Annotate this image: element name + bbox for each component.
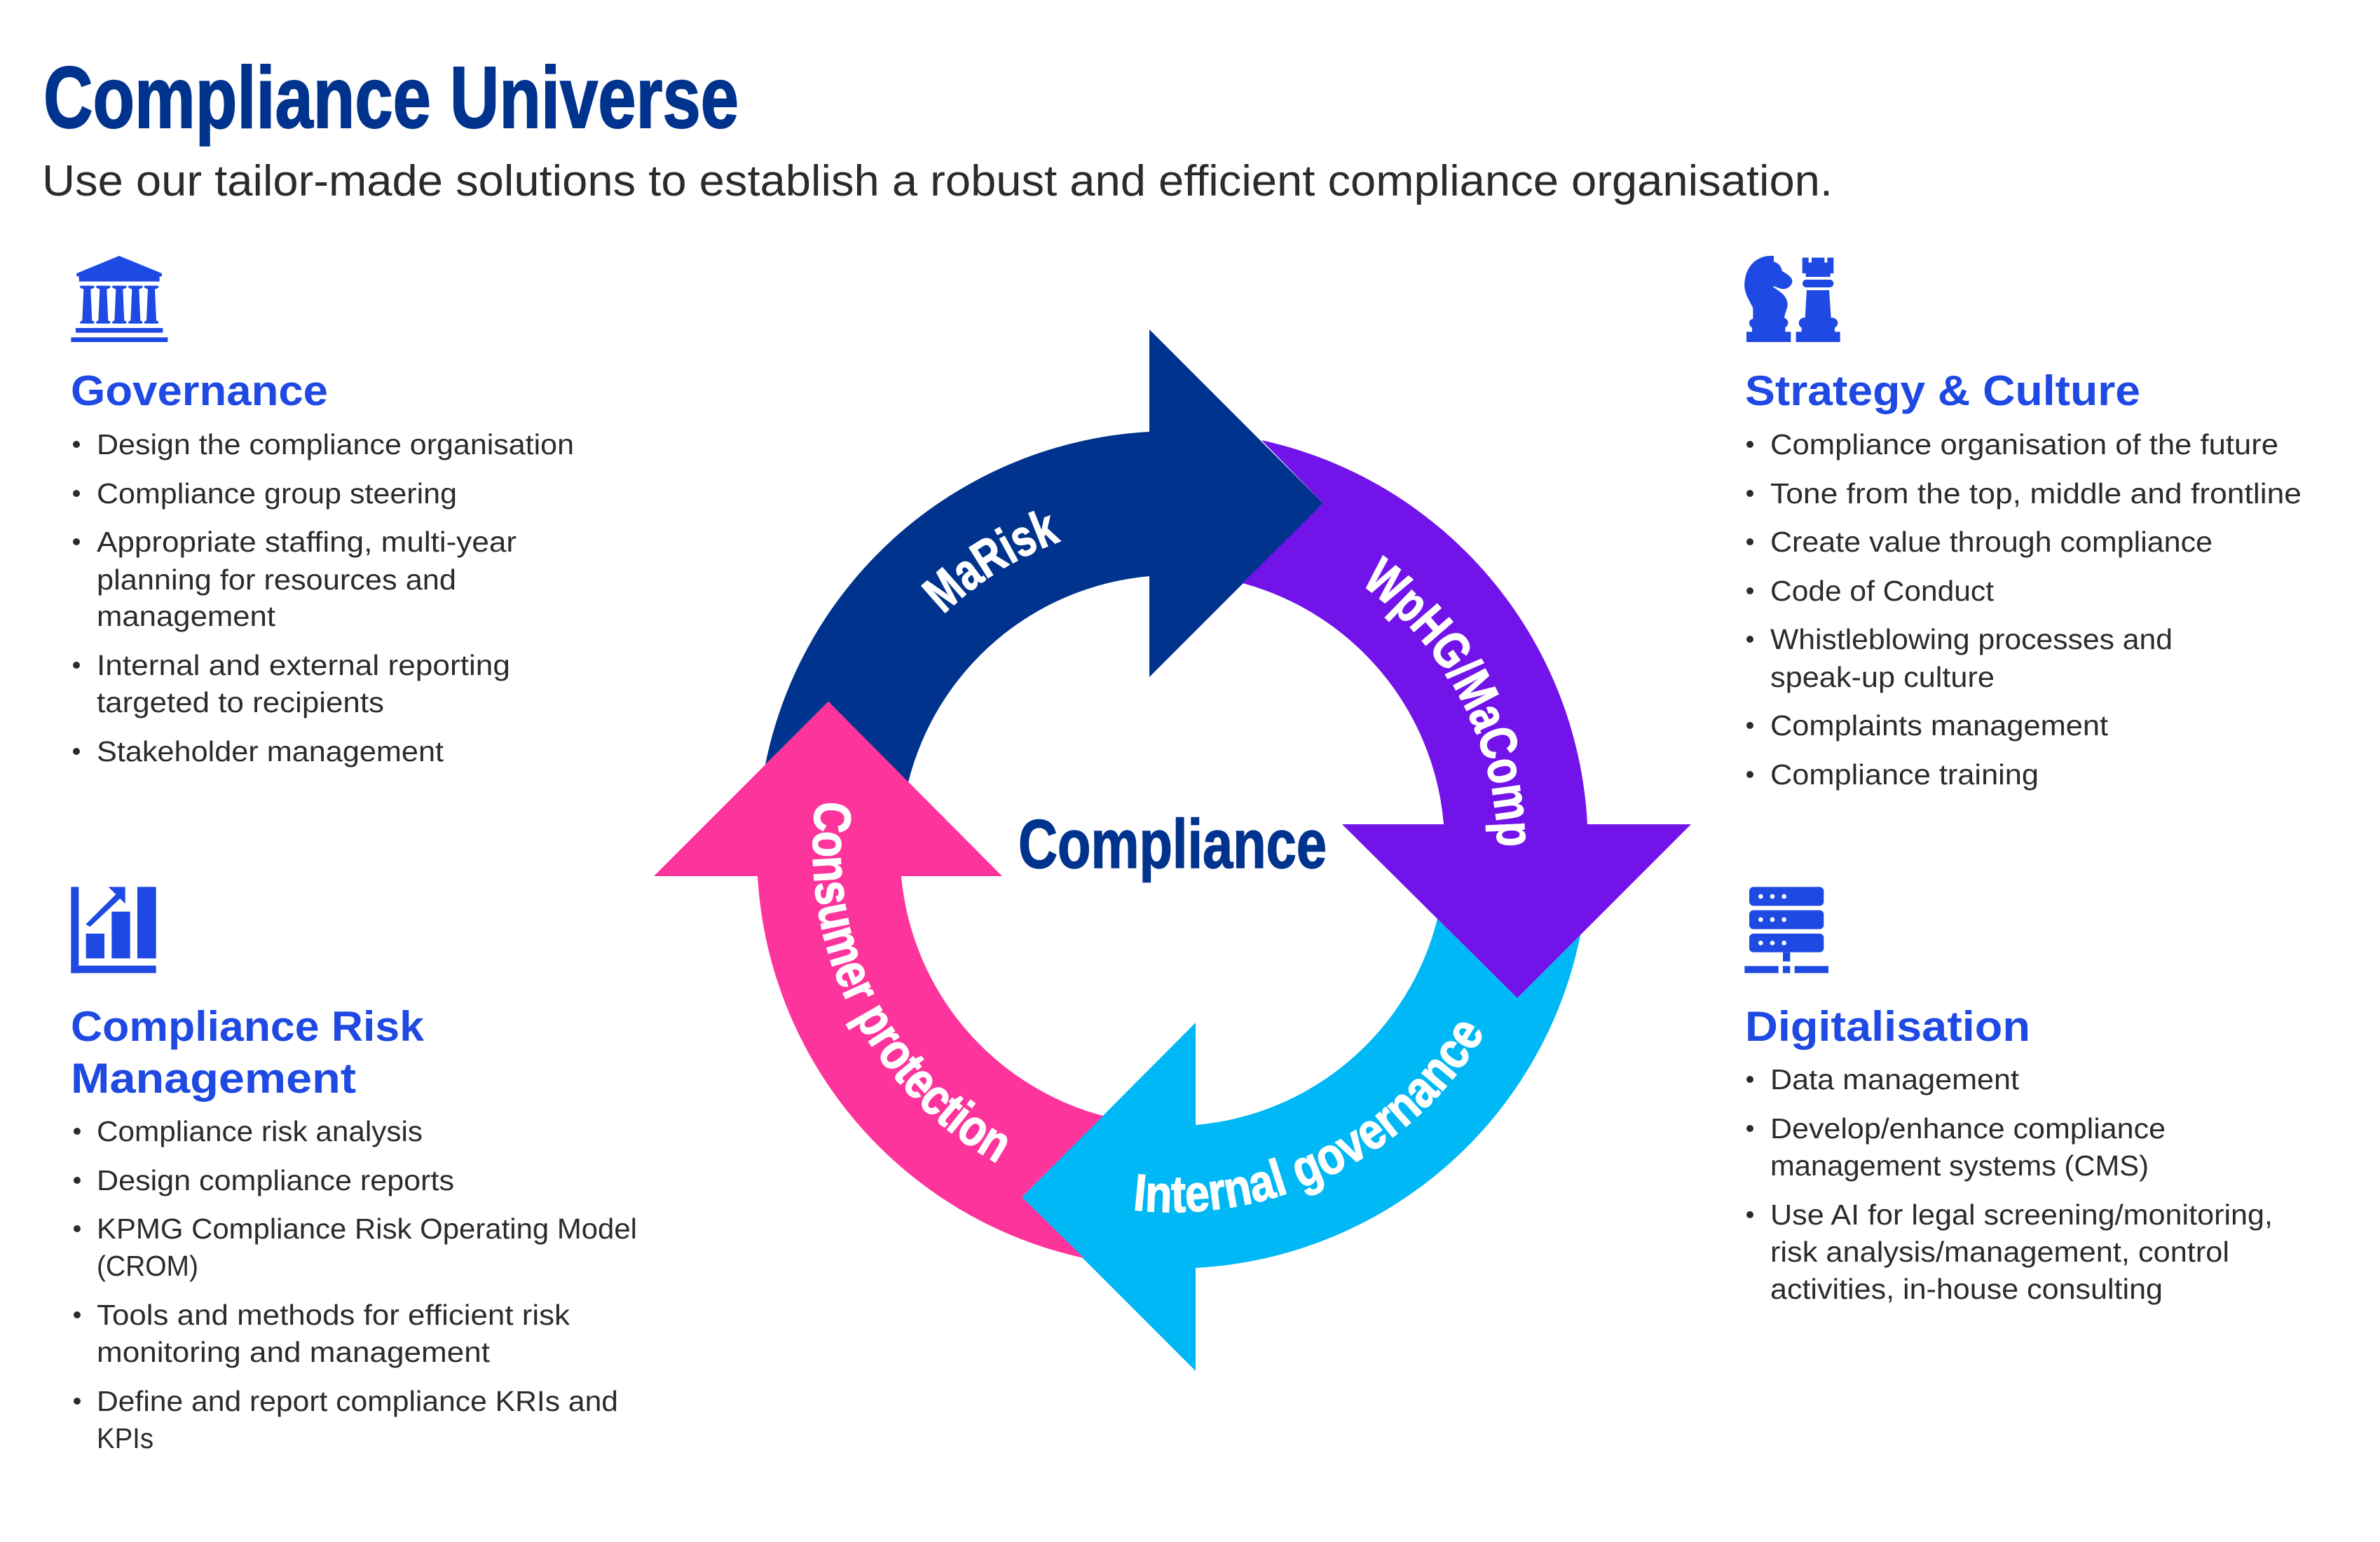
list: strategy items: speak-up culture — [1770, 661, 1995, 693]
list: governance items — [73, 428, 574, 767]
label: WpHG/MaComp: WpHG/MaComp — [1365, 555, 1526, 845]
cycle diagram — [654, 329, 1691, 1371]
list: governance items: Appropriate staffing, multi-year — [97, 526, 517, 558]
list: strategy items: Complaints management — [1770, 709, 2109, 742]
list: risk management items: Define and report compliance KRIs and — [97, 1385, 618, 1417]
icon: classical building — [71, 256, 167, 342]
icon: rising bar chart — [71, 887, 156, 973]
subtitle: Use our tailor-made solutions to establish a robust and efficient compliance organisation. — [42, 157, 1833, 205]
list: risk management items: Compliance risk analysis — [97, 1115, 423, 1147]
list: strategy items: Compliance training — [1770, 758, 2039, 791]
list: risk management items — [74, 1115, 637, 1454]
list: strategy items: Tone from the top, middle and frontline — [1770, 477, 2302, 510]
list: governance items: targeted to recipients — [97, 686, 384, 718]
list: governance items: Compliance group steering — [97, 477, 457, 510]
arrow: internal governance — [1022, 919, 1580, 1371]
heading line 2: Management — [71, 1055, 356, 1102]
list: governance items: Internal and external reporting — [97, 649, 510, 681]
list: strategy items — [1746, 428, 2302, 791]
list: governance items: management — [97, 600, 276, 632]
heading: compliance risk management: Compliance Risk — [71, 1003, 425, 1050]
list: risk management items: monitoring and management — [97, 1336, 491, 1368]
centre label: Compliance — [1018, 805, 1327, 882]
icon: chess knight and rook — [1744, 256, 1840, 342]
arrow: consumer protection — [654, 702, 1103, 1258]
list: governance items: Design the compliance organisation — [97, 428, 574, 460]
list: digitalisation items: management systems (CMS) — [1770, 1149, 2149, 1182]
list: digitalisation items: Data management — [1770, 1063, 2020, 1096]
list: governance items: Stakeholder management — [97, 735, 444, 767]
list: strategy items: Code of Conduct — [1770, 575, 1995, 607]
list: digitalisation items: risk analysis/management, control — [1770, 1236, 2229, 1268]
heading: governance: Governance — [71, 367, 328, 414]
icon: server stack — [1744, 887, 1828, 973]
panel: digitalisation — [1744, 887, 2273, 1305]
list: risk management items: KPMG Compliance Risk Operating Model — [97, 1213, 637, 1245]
list: strategy items: Create value through compliance — [1770, 526, 2213, 558]
panel: strategy and culture — [1744, 256, 2302, 791]
label: internal governance: Internal governance — [1135, 1022, 1482, 1213]
panel: compliance risk management — [71, 887, 637, 1454]
title: Compliance Universe — [43, 50, 739, 146]
list: risk management items: (CROM) — [97, 1250, 198, 1282]
heading: strategy and culture: Strategy & Culture — [1745, 367, 2140, 414]
list: digitalisation items: Develop/enhance compliance — [1770, 1112, 2166, 1145]
heading: digitalisation: Digitalisation — [1745, 1003, 2030, 1050]
arrow: MaRisk — [765, 329, 1323, 782]
list: strategy items: Compliance organisation of the future — [1770, 428, 2278, 460]
label: MaRisk: MaRisk — [921, 510, 1062, 613]
list: risk management items: Tools and methods for efficient risk — [97, 1299, 570, 1331]
list: digitalisation items: activities, in-house consulting — [1770, 1273, 2163, 1305]
list: risk management items: Design compliance reports — [97, 1164, 454, 1196]
list: risk management items: KPIs — [97, 1422, 153, 1454]
list: strategy items: Whistleblowing processes and — [1770, 623, 2173, 655]
list: governance items: planning for resources and — [97, 564, 456, 596]
label: consumer protection: Consumer protection — [812, 803, 1008, 1164]
list: digitalisation items — [1746, 1063, 2273, 1305]
panel: governance — [71, 256, 574, 767]
list: digitalisation items: Use AI for legal screening/monitoring, — [1770, 1199, 2273, 1231]
arrow: WpHG/MaComp — [1243, 440, 1691, 998]
